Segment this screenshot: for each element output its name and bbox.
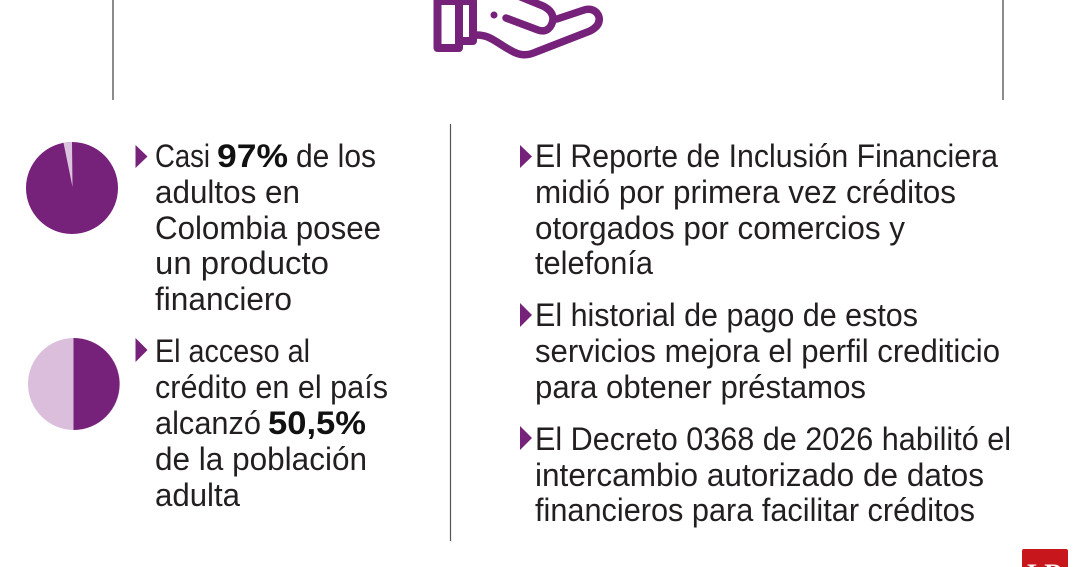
icon: open hand [438, 0, 599, 55]
text block: Reporte de Inclusión Financiera: midió por primera vez créditos [535, 174, 956, 210]
arrow bullet [520, 426, 532, 450]
text block: Decreto 0368 [520, 421, 1011, 528]
text block: acceso al crédito [136, 333, 388, 513]
text block: 97% de adultos [136, 138, 381, 317]
text block: historial de pago: para obtener préstamos [535, 369, 866, 405]
text block: Decreto 0368: financieros para facilitar créditos [535, 492, 975, 528]
text block: Reporte de Inclusión Financiera: otorgados por comercios y [535, 210, 905, 246]
text block: acceso al crédito: alcanzó [155, 405, 261, 441]
chart: pie 50,5% [28, 338, 120, 430]
text block: 97% de adultos: adultos en [155, 174, 300, 210]
text block: historial de pago: El historial de pago de estos [535, 297, 918, 333]
text block: 97% de adultos: financiero [155, 281, 292, 317]
logo: LR [1022, 549, 1068, 567]
text block: acceso al crédito: 50,5% [268, 405, 366, 441]
arrow bullet [520, 145, 532, 168]
text block: Reporte de Inclusión Financiera: El Reporte de Inclusión Financiera [535, 138, 998, 174]
text block: historial de pago: servicios mejora el perfil crediticio [535, 333, 1000, 369]
text block: 97% de adultos: Casi [155, 138, 210, 174]
text block: historial de pago [520, 297, 1000, 405]
text block: 97% de adultos: de los [296, 138, 376, 174]
text block: 97% de adultos: Colombia posee [155, 210, 381, 246]
text block: Reporte de Inclusión Financiera [520, 138, 998, 281]
arrow bullet [136, 338, 148, 362]
text block: acceso al crédito: adulta [155, 477, 240, 513]
text block: 97% de adultos: un producto [155, 245, 329, 281]
text block: Decreto 0368: intercambio autorizado de datos [535, 457, 984, 493]
chart: pie 97% [26, 142, 118, 234]
text block: acceso al crédito: El acceso al [155, 333, 310, 369]
text block: acceso al crédito: de la población [155, 441, 367, 477]
arrow bullet [136, 145, 148, 168]
text block: 97% de adultos: 97% [217, 138, 288, 174]
arrow bullet [520, 303, 532, 327]
text block: acceso al crédito: crédito en el país [155, 369, 388, 405]
text block: Reporte de Inclusión Financiera: telefonía [535, 245, 653, 281]
text block: Decreto 0368: El Decreto 0368 de 2026 habilitó el [535, 421, 1011, 457]
